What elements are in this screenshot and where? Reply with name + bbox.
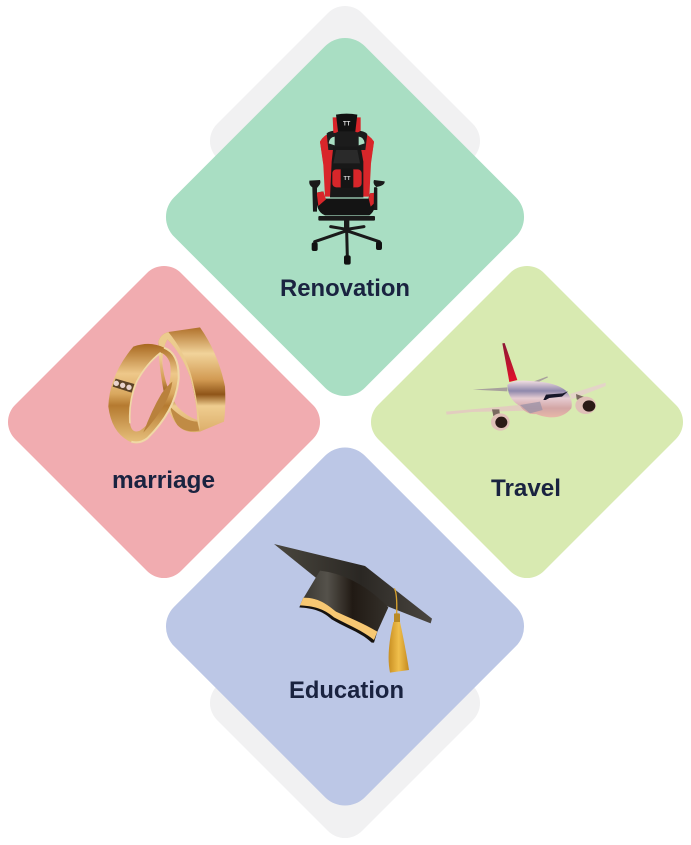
back panel: top grey diamond bbox=[200, 0, 490, 286]
label: Travel: Travel bbox=[491, 475, 561, 502]
icon: gaming chair: TT bbox=[344, 176, 351, 182]
panel: marriage bbox=[0, 256, 330, 588]
panel: Education bbox=[154, 436, 536, 817]
label: Education: Education bbox=[289, 677, 404, 704]
label: marriage: marriage bbox=[112, 467, 215, 494]
panel: Renovation bbox=[154, 26, 536, 408]
icon: gaming chair: TT bbox=[343, 121, 351, 127]
icon: airplane bbox=[446, 343, 606, 431]
back panel: bottom grey diamond bbox=[200, 558, 490, 845]
panel: Travel bbox=[361, 256, 691, 588]
icon: wedding rings bbox=[108, 327, 225, 443]
label: Renovation: Renovation bbox=[280, 275, 410, 302]
icon: graduation cap bbox=[274, 544, 432, 673]
icon: gaming chair bbox=[309, 114, 385, 265]
